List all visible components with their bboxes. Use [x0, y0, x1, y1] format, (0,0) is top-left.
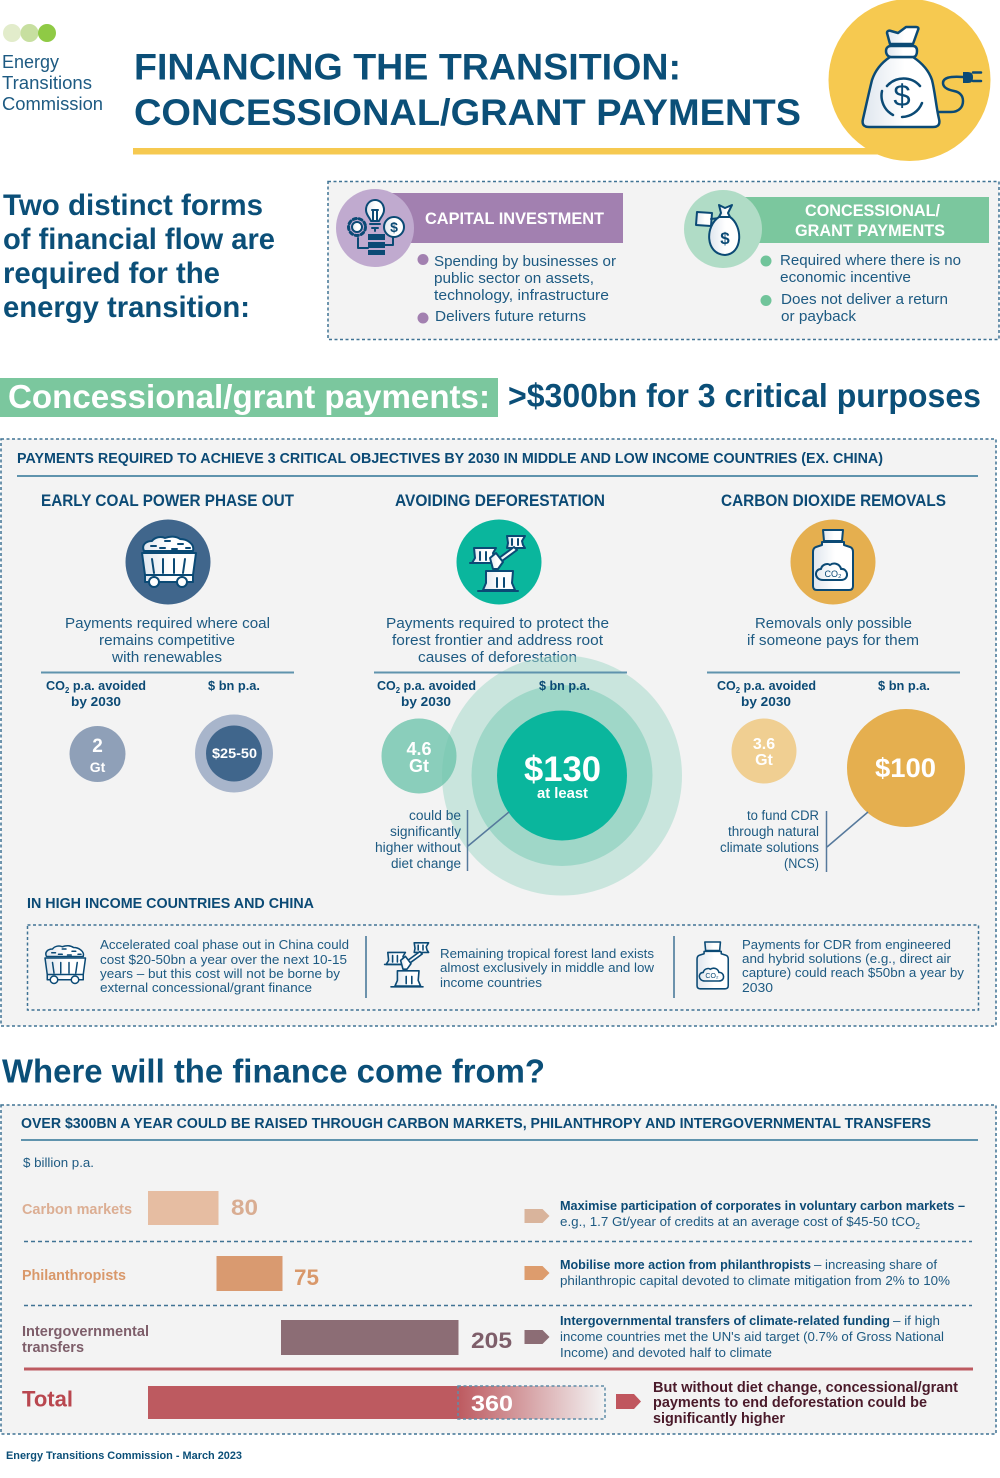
description: removals: if someone pays for them — [747, 633, 919, 649]
list: capital investment: Spending by businesses or — [434, 254, 616, 270]
bubble: 4.6 Gt — [382, 718, 456, 794]
column labels: deforestation — [377, 678, 590, 709]
text: engineered CDR payments — [742, 937, 965, 995]
annotation: natural climate solutions: through natural — [728, 824, 819, 839]
description: coal: Payments required where coal — [65, 616, 270, 632]
title: CONCESSIONAL/GRANT PAYMENTS — [134, 91, 801, 133]
bubble: $25-50 — [195, 714, 273, 792]
arrow: total — [616, 1394, 641, 1409]
text: philanthropists action: – increasing share of — [814, 1257, 937, 1272]
band: concessional/grant payments: CONCESSIONAL/ — [805, 202, 940, 220]
text: coal phase out in China: external concessional/grant finance — [100, 980, 312, 995]
list: concessional payments — [760, 253, 961, 325]
icon: concessional payments — [684, 190, 762, 268]
column labels: coal: CO — [46, 678, 66, 693]
icon: capital investment: $ — [390, 219, 398, 235]
column: carbon dioxide removals — [707, 492, 965, 872]
text: coal phase out in China: cost $20-50bn a year over the next 10-15 — [100, 952, 347, 967]
column: early coal power phase out — [41, 492, 294, 792]
column labels: removals: by 2030 — [741, 694, 791, 709]
row: intergovernmental transfers: 205 — [471, 1328, 512, 1353]
panel: two forms of financial flow — [328, 182, 999, 340]
section heading: concessional/grant payments — [0, 377, 981, 417]
column labels: deforestation: by 2030 — [401, 694, 451, 709]
annotation: natural climate solutions — [720, 808, 868, 872]
list: capital investment: Delivers future returns — [435, 309, 586, 325]
annotation: diet change — [375, 808, 509, 871]
list: capital investment: technology, infrastructure — [434, 288, 609, 304]
list: capital investment: public sector on assets, — [434, 271, 594, 287]
column: carbon dioxide removals: CARBON DIOXIDE REMOVALS — [721, 492, 946, 510]
column labels: deforestation: p.a. avoided — [400, 678, 476, 693]
text: engineered CDR payments: and hybrid solutions (e.g., direct air — [742, 951, 952, 966]
text: intergovernmental action: Intergovernmental transfers of climate-related funding — [560, 1313, 890, 1328]
panel: high income countries and China — [28, 925, 978, 1010]
column labels: deforestation: 2 — [396, 686, 401, 695]
annotation: diet change: higher without — [375, 840, 461, 855]
text: engineered CDR payments: Payments for CDR from engineered — [742, 937, 951, 952]
text: intergovernmental action: income countries met the UN's aid target (0.7% of Gross National — [560, 1329, 944, 1344]
bubble: $100 — [847, 709, 965, 827]
bubble: 3.6 Gt: 3.6 — [753, 736, 775, 753]
text: coal phase out in China: years – but this cost will not be borne by — [100, 966, 341, 981]
text: tropical forest land: Remaining tropical forest land exists — [440, 946, 655, 961]
row: total — [22, 1379, 958, 1427]
row: carbon markets — [22, 1191, 965, 1231]
icon: CO2 bottle: CO₂ — [824, 569, 842, 579]
section heading: concessional/grant payments: Concessional/grant payments: — [8, 378, 490, 415]
logo: Energy Transitions Commission — [2, 24, 103, 114]
column labels: deforestation: CO — [377, 678, 396, 693]
logo: Energy Transitions Commission: Transitions — [2, 73, 92, 93]
row: philanthropists: 75 — [294, 1265, 319, 1290]
description: deforestation — [386, 616, 609, 666]
heading: high income countries: IN HIGH INCOME COUNTRIES AND CHINA — [27, 896, 315, 912]
bubble: $130 at least: at least — [537, 786, 588, 802]
text: coal phase out in China: Accelerated coal phase out in China could — [100, 937, 349, 952]
title: FINANCING THE TRANSITION: — [134, 46, 681, 88]
intro heading: required for the — [3, 257, 220, 290]
description: deforestation: forest frontier and address root — [392, 633, 603, 649]
text: engineered CDR payments: 2030 — [742, 980, 773, 995]
band: concessional/grant payments: GRANT PAYMENTS — [795, 222, 945, 240]
column: early coal power phase out: EARLY COAL POWER PHASE OUT — [41, 492, 294, 510]
arrow: carbon markets — [524, 1209, 550, 1223]
list: concessional payments: economic incentive — [780, 270, 911, 286]
description: deforestation: Payments required to protect the — [386, 616, 609, 632]
column labels: removals: p.a. avoided — [740, 678, 816, 693]
panel heading: OVER $300BN A YEAR COULD BE RAISED THROUGH CARBON MARKETS, PHILANTHROPY AND INTERGOVERNMENTAL TRANSFERS — [21, 1116, 931, 1132]
bubble: $100: $100 — [875, 753, 936, 783]
annotation: natural climate solutions: to fund CDR — [747, 808, 819, 823]
icon: money bag with plug: $ — [893, 78, 911, 113]
panel: payments required — [1, 439, 996, 1026]
row: carbon markets: 80 — [231, 1195, 258, 1220]
icon: money bag with plug — [828, 0, 990, 161]
logo: Energy Transitions Commission: Commission — [2, 94, 103, 114]
description: coal: remains competitive — [99, 633, 235, 649]
text: carbon markets action: 2 — [915, 1222, 921, 1231]
title — [134, 46, 801, 133]
description: deforestation: causes of deforestation — [418, 650, 577, 666]
annotation: diet change: diet change — [391, 856, 461, 871]
bubble: 2 Gt — [70, 726, 126, 782]
bubble: $130 at least — [442, 656, 682, 896]
row: philanthropists — [22, 1256, 950, 1291]
description: coal: with renewables — [111, 650, 222, 666]
arrow: intergovernmental — [524, 1330, 550, 1344]
text: philanthropists action: philanthropic capital devoted to climate mitigation from 2% to 10% — [560, 1273, 950, 1288]
column: avoiding deforestation: AVOIDING DEFORESTATION — [395, 492, 605, 510]
section heading: concessional/grant payments: >$300bn for 3 critical purposes — [508, 377, 981, 414]
panel: sources of finance — [1, 1105, 996, 1434]
bubble: 4.6 Gt: Gt — [409, 756, 429, 776]
band: capital investment: CAPITAL INVESTMENT — [425, 209, 605, 228]
section heading: where will the finance come from: Where will the finance come from? — [2, 1052, 545, 1090]
intro heading: of financial flow are — [3, 223, 275, 256]
icon: concessional payments: $ — [720, 229, 730, 248]
text: engineered CDR payments: capture) could reach $50bn a year by — [742, 965, 965, 980]
text: intergovernmental action: Income) and devoted half to climate — [560, 1345, 772, 1360]
row: total: 360 — [471, 1391, 513, 1416]
annotation: natural climate solutions: climate solutions — [720, 840, 819, 855]
column labels: coal: p.a. avoided — [69, 678, 146, 693]
icon: tree stump and axe — [456, 520, 542, 604]
bubble: 2 Gt: Gt — [90, 759, 106, 775]
text: philanthropists action: Mobilise more action from philanthropists — [560, 1257, 811, 1272]
arrow: philanthropists — [524, 1266, 550, 1280]
text: tropical forest land: almost exclusively in middle and low — [440, 960, 655, 975]
description: coal — [65, 616, 270, 666]
list: concessional payments: or payback — [781, 309, 857, 325]
icon: capital investment — [336, 189, 414, 267]
column labels: deforestation: $ bn p.a. — [539, 678, 590, 693]
icon: CO2 bottle — [790, 520, 876, 604]
row: intergovernmental transfers — [22, 1313, 944, 1360]
row: intergovernmental transfers: Intergovernmental — [22, 1324, 149, 1340]
row: total: Total — [22, 1386, 73, 1412]
band: capital investment — [375, 193, 623, 243]
bubble: $25-50: $25-50 — [212, 745, 257, 761]
column labels: removals: 2 — [736, 686, 741, 695]
column labels: removals: $ bn p.a. — [878, 678, 930, 693]
text: carbon markets action: e.g., 1.7 Gt/year of credits at an average cost of $45-50 tCO — [560, 1214, 905, 1229]
description: removals — [747, 616, 919, 649]
title underline — [133, 148, 878, 154]
annotation: diet change: significantly — [390, 824, 461, 839]
band: concessional/grant payments — [745, 197, 989, 243]
icon: small tree stump — [385, 943, 429, 987]
intro heading: energy transition: — [3, 291, 250, 324]
panel heading: PAYMENTS REQUIRED TO ACHIEVE 3 CRITICAL OBJECTIVES BY 2030 IN MIDDLE AND LOW INCOME COUNTRIES (EX. CHINA) — [17, 451, 883, 467]
bubble: $130 at least: $130 — [524, 750, 601, 789]
icon: coal cart — [126, 520, 210, 604]
text: diet change caveat: significantly higher — [653, 1410, 785, 1427]
annotation: diet change: could be — [409, 808, 461, 823]
bubble: 2 Gt: 2 — [92, 736, 103, 757]
intro heading — [3, 189, 275, 324]
logo: Energy Transitions Commission: Energy — [2, 52, 59, 72]
text: diet change caveat: But without diet change, concessional/grant — [653, 1379, 958, 1396]
bubble: 4.6 Gt: 4.6 — [406, 739, 432, 759]
list: concessional payments: Required where there is no — [780, 253, 961, 269]
column labels: coal — [46, 678, 260, 709]
description: removals: Removals only possible — [755, 616, 912, 632]
intro heading: Two distinct forms — [3, 189, 263, 222]
row: carbon markets: Carbon markets — [22, 1202, 132, 1218]
footer: Energy Transitions Commission - March 2023 — [6, 1450, 242, 1462]
annotation: natural climate solutions: (NCS) — [784, 856, 819, 871]
text: philanthropists action — [560, 1257, 950, 1288]
list: concessional payments: Does not deliver a return — [781, 292, 948, 308]
text: tropical forest land — [440, 946, 655, 990]
bubble: 3.6 Gt — [732, 718, 796, 784]
row: intergovernmental transfers: transfers — [22, 1340, 84, 1356]
icon: small CO2 bottle — [697, 942, 728, 989]
column labels: removals: CO — [717, 678, 736, 693]
bubble: 3.6 Gt: Gt — [755, 752, 774, 769]
row: philanthropists: Philanthropists — [22, 1268, 126, 1284]
text: carbon markets action — [560, 1198, 965, 1231]
column labels: coal: by 2030 — [71, 694, 121, 709]
text: diet change caveat: payments to end deforestation could be — [653, 1394, 927, 1411]
column labels: coal: $ bn p.a. — [208, 678, 260, 693]
text: carbon markets action: Maximise participation of corporates in voluntary carbon markets – — [560, 1198, 965, 1213]
text: intergovernmental action: – if high — [893, 1313, 940, 1328]
text: intergovernmental action — [560, 1313, 944, 1360]
column: avoiding deforestation — [374, 492, 682, 896]
column labels: removals — [717, 678, 930, 709]
icon: small CO2 bottle: CO₂ — [705, 973, 719, 980]
icon: small coal cart — [45, 946, 86, 984]
axis unit label: $ billion p.a. — [23, 1156, 94, 1170]
text: tropical forest land: income countries — [440, 975, 543, 990]
column labels: coal: 2 — [65, 686, 70, 695]
text: diet change caveat — [653, 1379, 958, 1427]
list: capital investment — [418, 254, 616, 325]
text: coal phase out in China — [100, 937, 349, 995]
